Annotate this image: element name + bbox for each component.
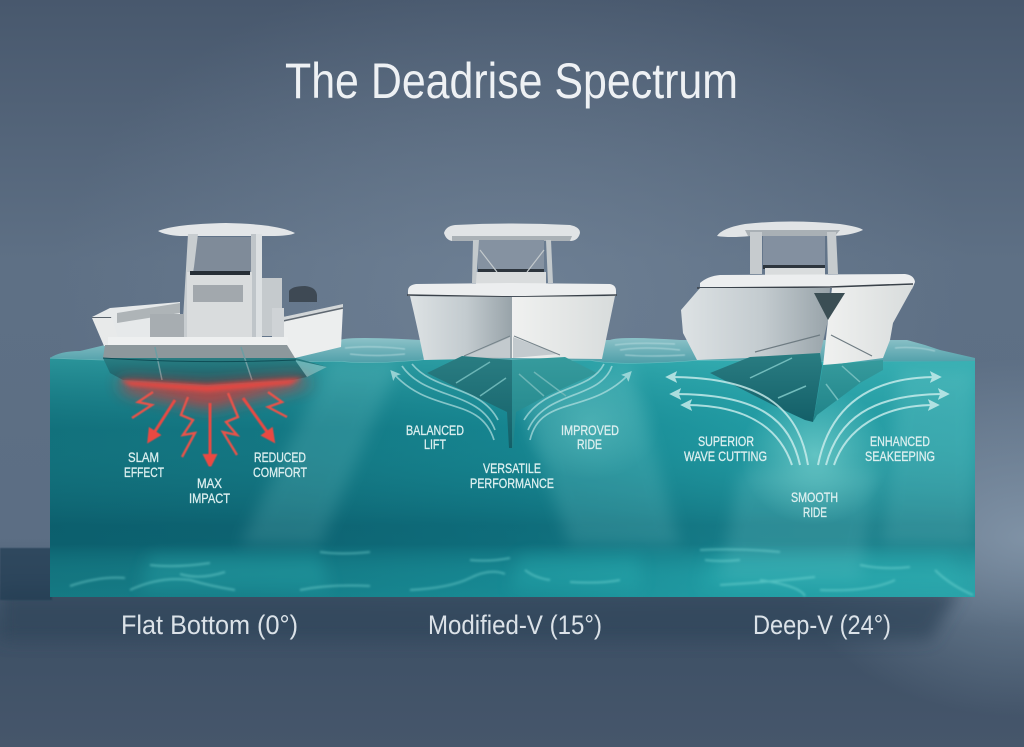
title: The Deadrise Spectrum [285,53,738,109]
label: enhanced seakeeping [865,433,935,464]
cockpit floor [108,337,288,346]
hull below water left [427,356,512,448]
windshield and frame [472,240,553,284]
label: smooth ride: SMOOTH [791,489,838,505]
caption: modified-v: Modified-V (15°) [428,610,602,640]
label: max impact [189,475,230,506]
label: versatile performance: PERFORMANCE [470,475,554,491]
floor shadow [0,548,960,640]
canopy [444,224,580,241]
right hull [283,307,343,358]
chines above water [465,337,558,358]
label: balanced lift [406,422,464,452]
caustics [70,549,973,596]
slam arrows [152,398,270,460]
transom above water [103,345,295,358]
label: superior wave cutting [684,433,767,464]
windshield and frame [750,232,838,276]
deck [408,283,616,296]
label: improved ride [561,422,619,452]
label: reduced comfort: REDUCED [254,449,306,465]
label: balanced lift: LIFT [424,436,446,452]
hull below water left [710,353,822,422]
lightning bolts [132,392,287,457]
hull left side [92,318,190,346]
label: slam effect: EFFECT [124,464,164,480]
hull left [681,288,830,360]
hull below water right [813,360,883,422]
label: versatile performance [470,460,554,491]
glow by modified-v [520,370,660,480]
bow v panel [814,293,845,320]
label: enhanced seakeeping: ENHANCED [870,433,930,449]
impact glow [118,378,312,408]
canopy [158,223,295,236]
label: smooth ride [791,489,838,520]
label: enhanced seakeeping: SEAKEEPING [865,448,935,464]
water surface [50,338,975,363]
console [187,272,252,338]
light rays [240,362,975,580]
ripples [345,343,935,356]
boat: flat bottom [92,223,343,506]
sea floor lit patches [144,553,634,590]
boat: deep-v [670,222,945,520]
canopy [717,222,863,237]
caption: flat bottom: Flat Bottom (0°) [121,610,298,640]
hull below water right [512,357,597,448]
outboard motor [289,286,317,302]
label: max impact: MAX [197,475,223,491]
flow lines right [818,377,945,465]
label: superior wave cutting: WAVE CUTTING [684,448,767,464]
water block [50,358,975,597]
label: improved ride: IMPROVED [561,422,619,438]
glow under deep-v keel [740,385,890,525]
caption: deep-v: Deep-V (24°) [753,610,891,640]
label: slam effect: SLAM [128,449,159,465]
label: smooth ride: RIDE [803,504,827,520]
label: superior wave cutting: SUPERIOR [698,433,754,449]
hull right [823,285,914,366]
label: reduced comfort: COMFORT [253,464,307,480]
label: max impact: IMPACT [189,490,230,506]
flow lines right [524,364,629,440]
deck left wall [92,302,180,338]
flow lines left [670,377,808,465]
label: versatile performance: VERSATILE [483,460,541,476]
label: improved ride: RIDE [577,436,602,452]
hull right [512,296,615,359]
waterline highlight [50,358,975,363]
deck [700,274,915,289]
canopy frame and glass [182,234,262,337]
flow lines left [393,364,498,440]
label: slam effect [124,449,164,480]
hull left [410,296,512,360]
label: reduced comfort [253,449,307,480]
boat: modified-v [393,224,629,491]
label: balanced lift: BALANCED [406,422,464,438]
hull below water [103,358,327,385]
